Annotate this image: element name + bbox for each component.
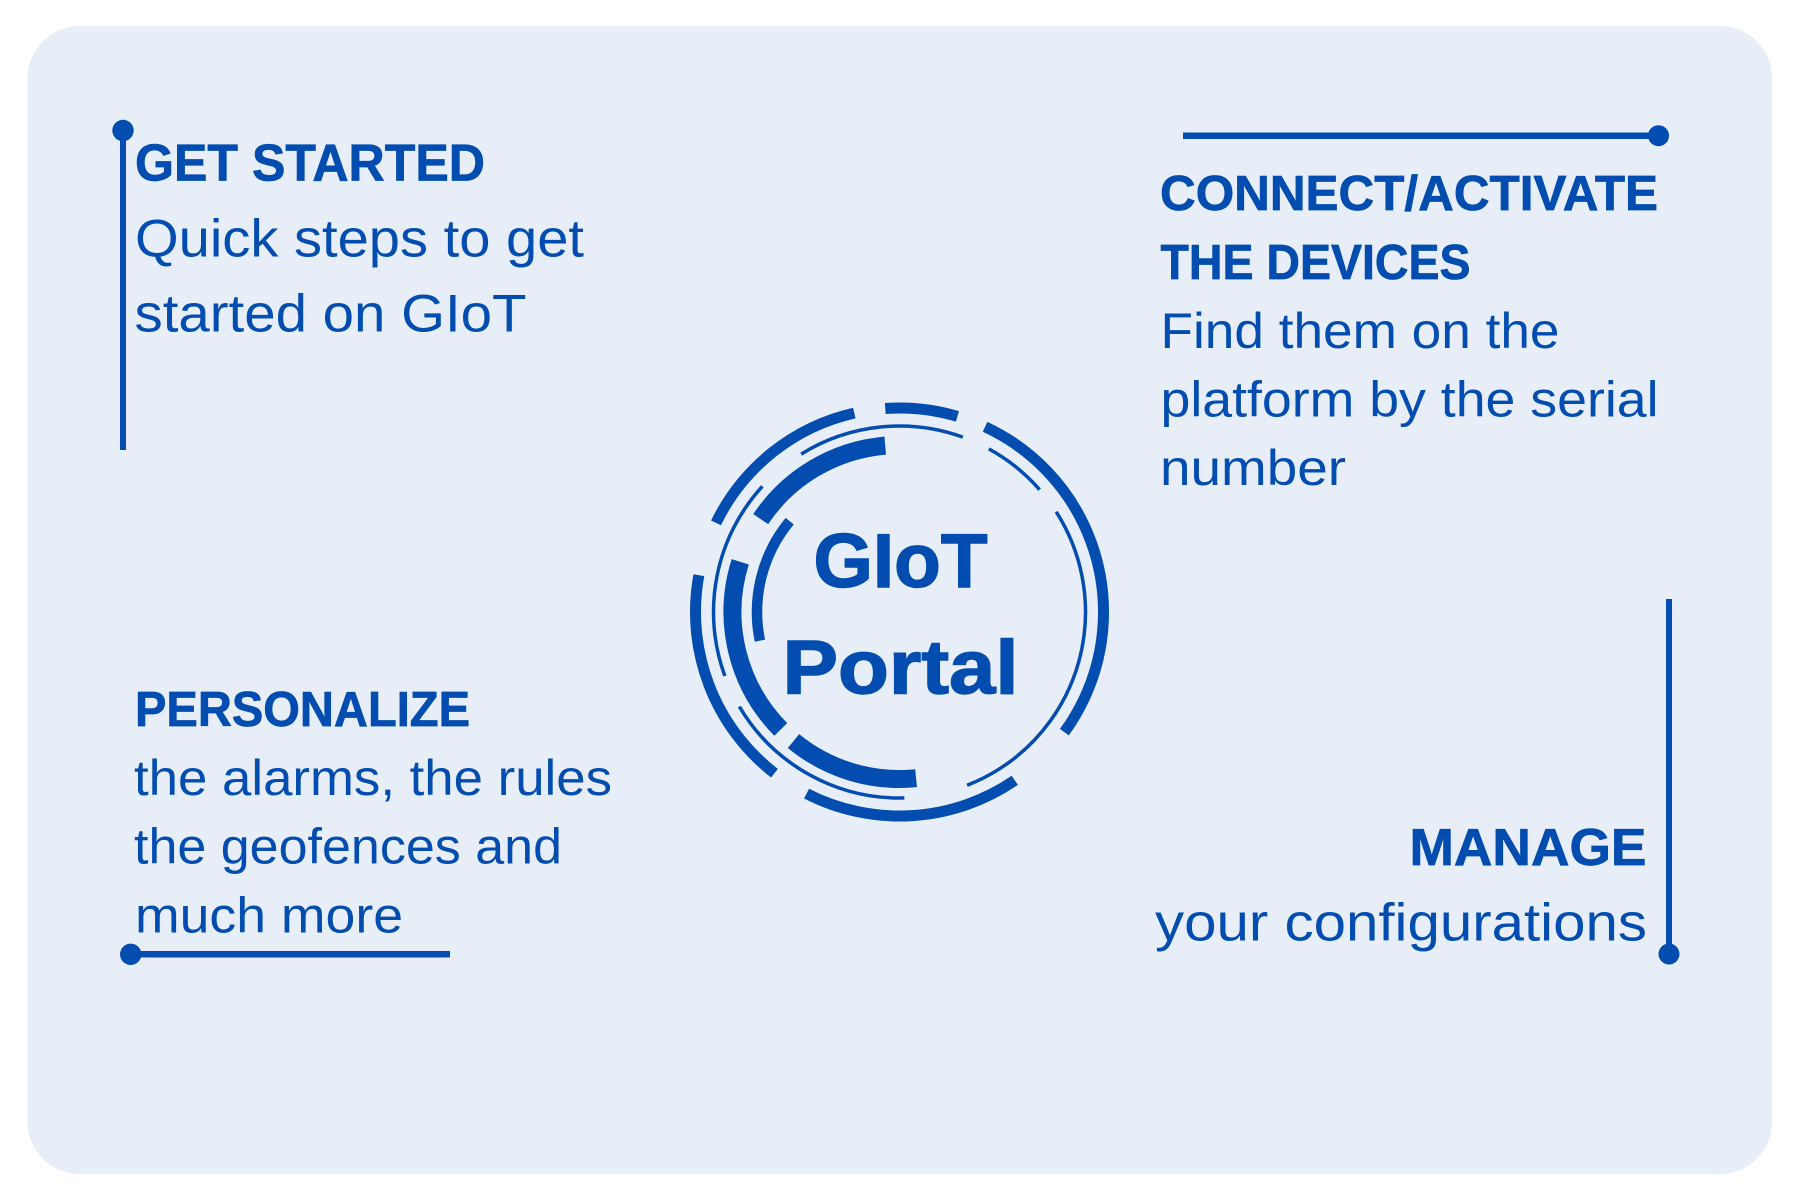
title: GIoT Portal: Portal (782, 626, 1018, 710)
panel: personalize (120, 683, 612, 965)
panel: get started (112, 120, 584, 450)
heading: connect/activate the devices (1160, 167, 1658, 290)
panel: manage (1155, 599, 1680, 964)
text: get started description: started on GIoT (134, 284, 526, 344)
heading: manage: MANAGE (1410, 819, 1646, 877)
icon: segmented concentric rings (613, 326, 1186, 898)
heading: connect/activate the devices: CONNECT/ACTIVATE (1160, 167, 1658, 221)
title: GIoT Portal (782, 519, 1018, 710)
text: personalize description: much more (135, 888, 403, 944)
text: connect description: number (1160, 440, 1346, 496)
heading: connect/activate the devices: THE DEVICES (1160, 236, 1470, 290)
text: connect description: Find them on the (1160, 303, 1560, 359)
heading: personalize: PERSONALIZE (135, 683, 470, 737)
connector: vertical line with dot (112, 120, 134, 450)
text: get started description (134, 210, 584, 344)
text: personalize description: the alarms, the rules (134, 750, 612, 806)
title: GIoT Portal: GIoT (814, 519, 988, 604)
connector: vertical line with dot (1658, 599, 1680, 964)
text: personalize description (134, 750, 612, 944)
text: connect description: platform by the serial (1160, 372, 1658, 428)
center: GIoT Portal logo (613, 326, 1186, 898)
heading: get started: GET STARTED (135, 134, 485, 192)
text: manage description: your configurations (1155, 894, 1647, 952)
connector: horizontal line with dot (120, 944, 450, 965)
connector: horizontal line with dot (1183, 125, 1669, 146)
panel: connect and activate (1160, 125, 1669, 496)
text: personalize description: the geofences and (134, 818, 562, 874)
text: connect description (1160, 303, 1658, 496)
text: get started description: Quick steps to get (135, 210, 584, 268)
